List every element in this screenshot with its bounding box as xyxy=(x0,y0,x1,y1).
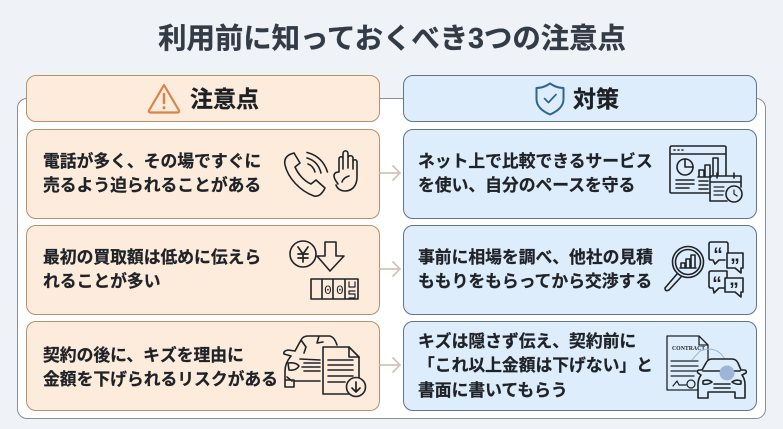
text: caution 2 xyxy=(43,248,261,291)
text: caution 3: 契約の後に、キズを理由に xyxy=(43,346,244,365)
icon: magnifier and speech bubbles: ” xyxy=(730,256,740,277)
text: countermeasure 1: を使い、自分のペースを守る xyxy=(418,176,635,195)
text: countermeasure 2: ももりをもらってから交渉する xyxy=(418,272,652,291)
text: caution 1: 売るよう迫られることがある xyxy=(43,176,261,195)
text: caution 3: 金額を下げられるリスクがある xyxy=(43,370,278,389)
icon: contract and car xyxy=(666,335,748,399)
icon: yen down and counter xyxy=(289,240,359,300)
card: countermeasure 1 xyxy=(403,129,757,219)
text: countermeasure 3: 書面に書いてもらう xyxy=(418,381,568,400)
text: caution 2: れることが多い xyxy=(43,272,160,291)
text: countermeasure 3 xyxy=(418,332,653,400)
text: countermeasure 1: ネット上で比較できるサービス xyxy=(418,152,653,171)
text: countermeasure 1 xyxy=(418,152,653,195)
panel: outer frame xyxy=(17,98,766,419)
card: countermeasure 2 xyxy=(403,225,757,315)
text: caution 1: 電話が多く、その場ですぐに xyxy=(43,152,261,171)
card: caution 1 xyxy=(26,129,380,219)
title: 利用前に知っておくべき3つの注意点 xyxy=(158,23,626,55)
arrow: row 1 xyxy=(379,165,401,181)
text: caution 1 xyxy=(43,152,261,195)
icon: contract and car: CONTRACT xyxy=(672,346,705,352)
icon: yen down and counter: 0 xyxy=(336,283,344,298)
arrow: row 3 xyxy=(379,357,401,373)
icon: comparison dashboard and calendar xyxy=(669,145,743,203)
card: caution 2 xyxy=(26,225,380,315)
icon: damaged car and document xyxy=(283,335,366,398)
icon: phone and raised hand xyxy=(284,150,358,197)
text: caution 3 xyxy=(43,346,278,389)
icon: shield check xyxy=(536,82,564,116)
header: caution column xyxy=(26,75,380,122)
text: caution 2: 最初の買取額は低めに伝えら xyxy=(43,248,261,267)
text: countermeasure 2 xyxy=(418,248,653,291)
heading: caution: 注意点 xyxy=(190,86,259,112)
header: countermeasure column xyxy=(403,75,757,122)
icon: magnifier and speech bubbles xyxy=(664,241,744,301)
heading: countermeasure: 対策 xyxy=(573,86,619,112)
arrow: row 2 xyxy=(379,261,401,277)
text: countermeasure 3: 「これ以上金額は下げない」と xyxy=(418,356,653,375)
card: caution 3 xyxy=(26,321,380,411)
icon: magnifier and speech bubbles: ” xyxy=(729,280,739,301)
text: countermeasure 2: 事前に相場を調べ、他社の見積 xyxy=(418,248,653,267)
text: countermeasure 3: キズは隠さず伝え、契約前に xyxy=(418,332,636,351)
icon: warning triangle xyxy=(148,84,180,114)
icon: magnifier and speech bubbles: “ xyxy=(712,274,722,295)
card: countermeasure 3 xyxy=(403,321,757,411)
icon: magnifier and speech bubbles: “ xyxy=(713,245,723,266)
icon: yen down and counter: 0 xyxy=(324,283,332,298)
